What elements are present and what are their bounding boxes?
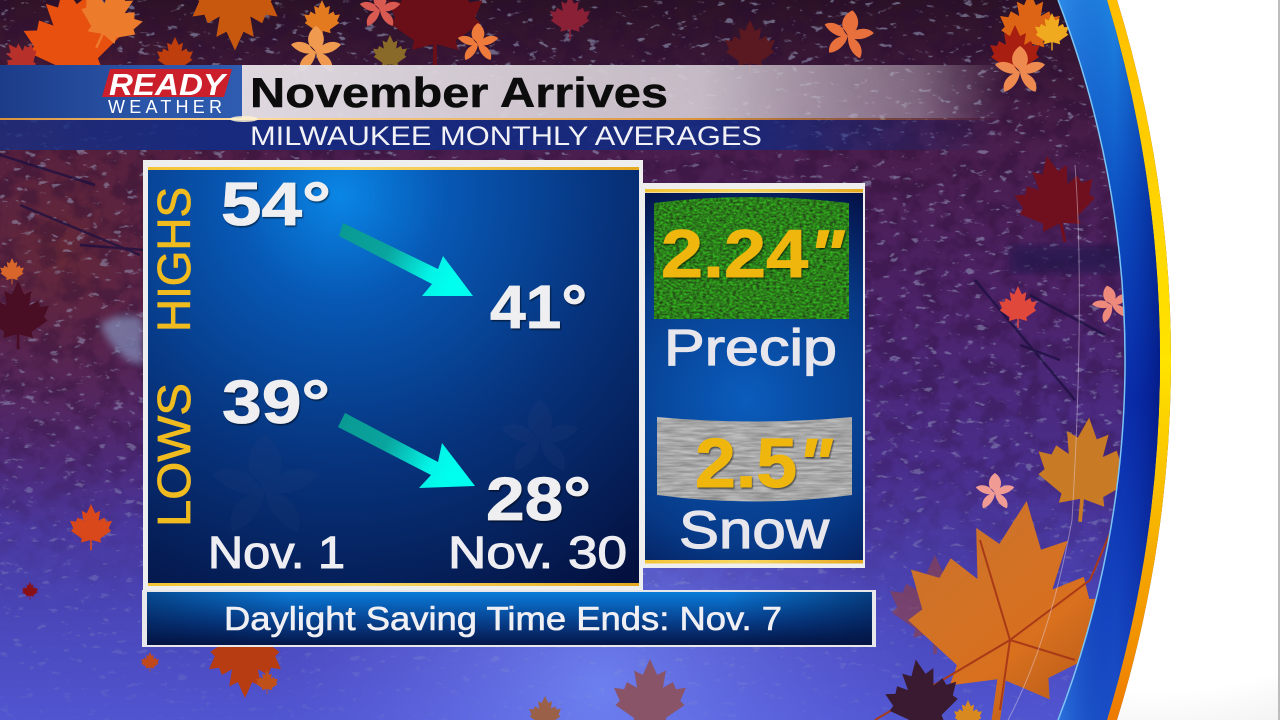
arrow: highs falling bbox=[339, 223, 473, 296]
grass swatch bbox=[654, 191, 849, 319]
bottom leaves bbox=[614, 659, 686, 720]
logo: Ready Weather: READY bbox=[109, 67, 229, 102]
flare on orange rule bbox=[230, 116, 258, 122]
precip label: Precip bbox=[664, 319, 837, 376]
title band bbox=[242, 65, 1007, 118]
date: Nov. 1: Nov. 1 bbox=[208, 527, 345, 578]
label: highs: HIGHS bbox=[148, 187, 200, 332]
high on Nov. 1: 54° bbox=[221, 170, 331, 238]
callout: daylight saving time bbox=[142, 590, 876, 647]
logo: Ready Weather: WEATHER bbox=[108, 97, 222, 117]
snow amount: 2.5" bbox=[695, 424, 833, 502]
panel: high and low temperatures bbox=[143, 160, 643, 590]
title: November Arrives bbox=[250, 69, 668, 116]
logo: Ready Weather bbox=[102, 67, 232, 117]
high on Nov. 30: 41° bbox=[490, 273, 587, 341]
subtitle: MILWAUKEE MONTHLY AVERAGES bbox=[250, 121, 762, 151]
low on Nov. 1: 39° bbox=[222, 368, 330, 436]
subtitle band bbox=[0, 120, 1000, 150]
arrow: lows falling bbox=[338, 413, 475, 488]
low on Nov. 30: 28° bbox=[486, 465, 591, 533]
callout: daylight saving time: Daylight Saving Time Ends: Nov. 7 bbox=[224, 600, 782, 637]
logo band bbox=[0, 65, 242, 118]
left leaves bbox=[70, 504, 112, 550]
side leaves bbox=[1008, 148, 1104, 250]
header banner bbox=[0, 65, 1007, 151]
snow label: Snow bbox=[679, 501, 830, 560]
label: lows: LOWS bbox=[148, 383, 200, 527]
precip amount: 2.24" bbox=[661, 216, 845, 292]
snow swatch bbox=[657, 417, 852, 507]
date: Nov. 30: Nov. 30 bbox=[448, 527, 627, 578]
curved frame: white panel with gold and blue arcs bbox=[1008, 0, 1280, 720]
top leaves bbox=[17, 0, 129, 96]
panel: precipitation and snow bbox=[643, 183, 865, 568]
orange rule bbox=[0, 118, 1000, 120]
